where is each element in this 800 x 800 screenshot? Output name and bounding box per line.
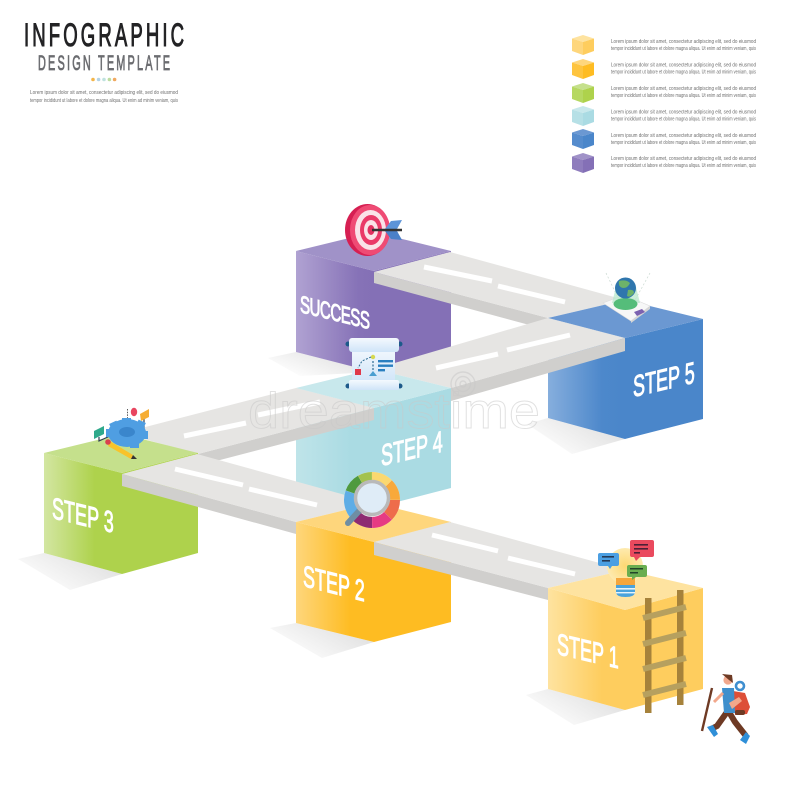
road: step 3 to step 4: [122, 388, 374, 466]
icon: hiker with backpack: [702, 674, 750, 744]
legend row 5: Lorem ipsum dolor sit amet, consectetur adipiscing elit, sed do eiusmod: [611, 133, 756, 139]
icon: globe hologram on phone: [603, 273, 650, 323]
block: step 1: STEP 1: [557, 628, 619, 676]
block: step 2: [296, 503, 451, 642]
legend row 3: Lorem ipsum dolor sit amet, consectetur adipiscing elit, sed do eiusmod: [611, 86, 756, 92]
block: step 3: [44, 434, 198, 574]
legend row 6: Lorem ipsum dolor sit amet, consectetur adipiscing elit, sed do eiusmod: [611, 156, 756, 162]
intro text block: Lorem ipsum dolor sit amet, consectetur adipiscing elit, sed do eiusmod: [30, 90, 178, 96]
road: step 5 to success: [374, 252, 625, 330]
block: success: SUCCESS: [300, 292, 370, 335]
legend row 2: [572, 59, 756, 79]
legend row 6: [572, 153, 756, 173]
icon: gear with pencil and flags: [94, 408, 149, 459]
legend row 3: [572, 83, 756, 103]
block: success: [296, 232, 451, 372]
block: step 4: STEP 4: [381, 425, 443, 473]
icon: light bulb with speech bubbles: [598, 540, 654, 597]
legend row 4: [572, 106, 756, 126]
icon: colour wheel with magnifier: [340, 468, 404, 532]
legend row 1: Lorem ipsum dolor sit amet, consectetur adipiscing elit, sed do eiusmod: [611, 39, 756, 45]
block: step 3: STEP 3: [52, 492, 114, 540]
intro text block: tempor incididunt ut labore et dolore magna aliqua. Ut enim ad minim veniam, quis: [30, 98, 178, 104]
legend row 1: [572, 35, 756, 55]
icon: ladder: [643, 590, 686, 713]
block: step 5: STEP 5: [633, 356, 695, 404]
title: INFOGRAPHIC: [24, 17, 184, 53]
legend row 4: Lorem ipsum dolor sit amet, consectetur adipiscing elit, sed do eiusmod: [611, 110, 756, 116]
intro text block: [30, 90, 178, 104]
legend row 2: Lorem ipsum dolor sit amet, consectetur adipiscing elit, sed do eiusmod: [611, 62, 756, 68]
subtitle: DESIGN TEMPLATE: [38, 51, 170, 75]
legend: [572, 35, 756, 173]
block: step 1: [548, 570, 703, 710]
legend row 5: [572, 129, 756, 149]
decorative colour dots: [91, 78, 116, 81]
watermark: dreamstime: [248, 383, 540, 439]
block: step 2: STEP 2: [303, 560, 365, 609]
road: step 1 to step 2: [374, 522, 625, 600]
icon: route map scroll: [346, 338, 402, 390]
block: step 5: [548, 300, 703, 439]
icon: target with arrow: [345, 204, 402, 256]
road: step 4 to step 5: [374, 318, 625, 401]
block: step 4: [296, 369, 451, 508]
road: step 2 to step 3: [122, 454, 374, 534]
cube shadows: [18, 352, 625, 725]
